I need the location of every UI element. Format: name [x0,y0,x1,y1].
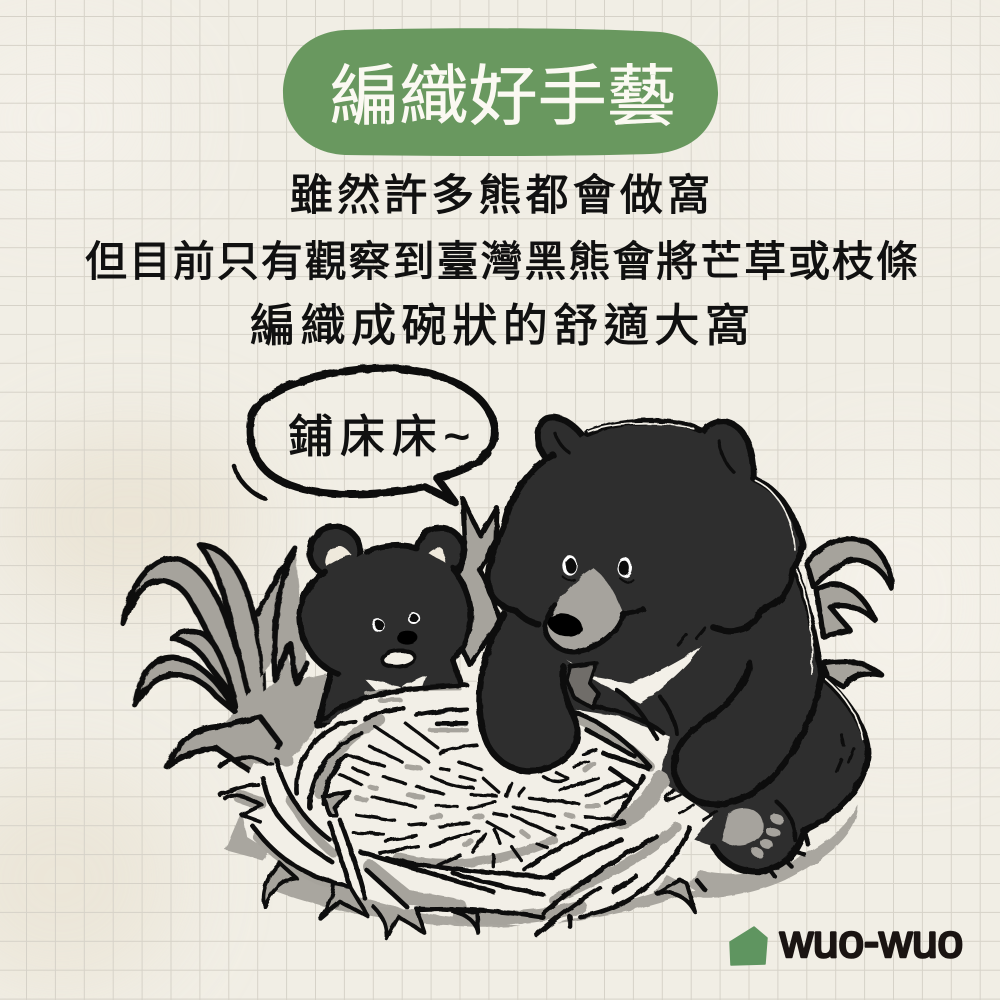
big bear [480,417,868,877]
nest radial twig strokes [338,723,627,867]
title text: 編織好手藝 [330,59,676,133]
big bear rim light [588,423,863,740]
grass: right clump [807,539,892,687]
little bear body [318,657,467,727]
body text: 但目前只有觀察到臺灣黑熊會將芒草或枝條 [85,238,918,285]
big bear ear marks [555,433,733,472]
body text: 編織成碗狀的舒適大窩 [250,300,750,351]
illustration: bears and nest [123,417,892,938]
little bear head [299,545,470,675]
nest base [240,685,713,928]
big bear arms [479,613,822,820]
speech bubble [234,368,495,502]
nest grey weaving [240,688,677,918]
grass: behind the bears [455,499,500,665]
logo: wuo-wuo [730,915,963,967]
big bear foot [722,808,764,846]
big bear muzzle [545,568,623,652]
grass blades by chest [567,663,598,708]
big bear left arm [479,613,577,771]
big bear head scallops [488,570,793,631]
big bear fur ticks [678,628,853,772]
big bear ears [538,417,754,480]
woven nest [220,685,713,938]
little bear eyes [372,612,420,631]
ground shadow [225,805,858,927]
icon: green house [730,927,767,965]
big bear claws [543,750,717,820]
big bear nose [545,610,585,640]
little bear nose [397,631,418,645]
big bear hip, body and head [480,422,868,872]
big bear chest mark [567,646,702,703]
body text: 雖然許多熊都會做窩 [290,172,710,220]
big bear right arm [674,663,822,804]
nest outer twig strokes [253,685,705,935]
big bear toe pads [749,813,786,860]
bubble text: 鋪床床~ [288,411,470,462]
big bear eyes [562,556,634,582]
little bear mouth [381,649,416,668]
big bear foot claws [770,802,808,877]
little bear [299,526,471,727]
grass: left clump [123,545,327,780]
title pill [283,28,718,156]
logo wordmark: wuo-wuo [779,915,963,967]
little bear ears [310,526,464,577]
body text [85,172,918,351]
little bear chest mark [365,675,426,695]
little bear inner ears [325,546,446,566]
nest grey leaf tufts [220,757,695,938]
big bear mouth [623,609,643,613]
nest grey fleck marks [357,737,617,845]
